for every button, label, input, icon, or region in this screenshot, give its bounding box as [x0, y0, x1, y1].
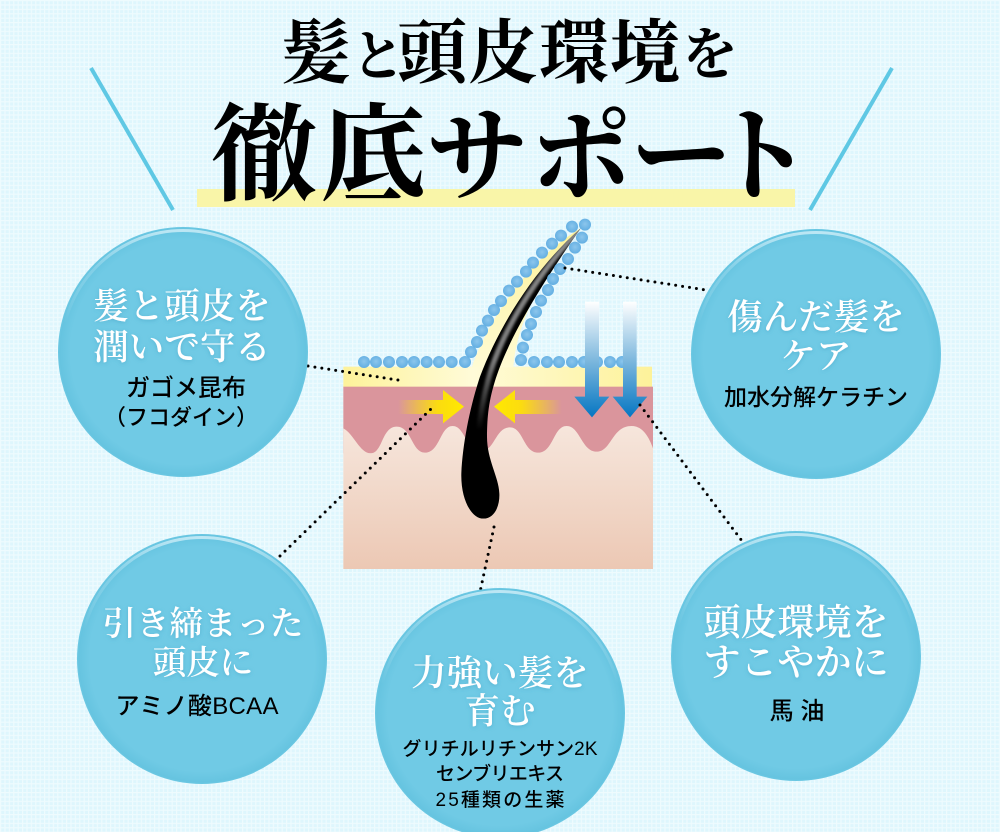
panel: moisturize hair and scalp: [58, 227, 308, 477]
panel: healthy scalp environment: 馬 油: [770, 698, 824, 725]
arrow: blue down 2: [613, 302, 647, 417]
lower skin with wavy edge: [343, 426, 653, 569]
panel: care for damaged hair: [691, 229, 941, 479]
title line 1: を: [682, 25, 738, 87]
title line 2: サ: [426, 102, 528, 215]
dotted leader lines: [280, 268, 742, 592]
cuticle beads: [358, 219, 628, 368]
pink skin layer: [343, 387, 653, 453]
panel: firm scalp: アミノ酸BCAA: [116, 693, 278, 720]
panel: firm scalp: 引き締まった: [102, 606, 304, 643]
title highlight bar: [197, 189, 795, 207]
panel: healthy scalp environment: 頭皮環境を: [704, 602, 888, 644]
right decorative slash: [810, 68, 892, 210]
panel: moisturize hair and scalp: ガゴメ昆布: [126, 375, 246, 402]
panel: strong hair: [375, 588, 625, 832]
panel: moisturize hair and scalp: 髪と頭皮を: [93, 286, 271, 326]
left decorative slash: [91, 68, 173, 210]
yellow hair sheath: [472, 228, 581, 367]
title line 2: ポ: [530, 102, 632, 215]
title line 1: 境: [610, 16, 680, 93]
title line 1: 環: [539, 16, 609, 93]
panel: healthy scalp environment: [671, 531, 921, 781]
panel: firm scalp: 頭皮に: [153, 645, 253, 682]
panel: strong hair: グリチルリチンサン2K: [402, 738, 598, 760]
arrow: blue down 1: [574, 302, 609, 417]
hair and scalp cross-section diagram: [343, 219, 653, 569]
panel: healthy scalp environment: すこやかに: [704, 643, 888, 684]
panel: care for damaged hair: 傷んだ髪を: [727, 297, 905, 337]
title line 1: 頭: [397, 16, 471, 93]
title line 1: 髪: [281, 16, 351, 93]
panel: care for damaged hair: ケア: [780, 336, 852, 376]
panel: strong hair: センブリエキス: [436, 762, 564, 785]
panel: strong hair: 育む: [464, 691, 536, 731]
title line 2: ト: [710, 102, 812, 215]
panel: strong hair: 力強い髪を: [411, 653, 589, 693]
panel: firm scalp: [77, 534, 327, 784]
title line 1: 皮: [468, 16, 538, 93]
panel: moisturize hair and scalp: 潤いで守る: [93, 327, 271, 367]
title line 2: ー: [630, 102, 732, 215]
hair strand: [461, 228, 580, 519]
arrow: right yellow: [494, 390, 562, 423]
title line 2: 徹: [211, 98, 317, 215]
panel: strong hair: 25種類の生薬: [436, 789, 564, 811]
yellow moisture layer: [343, 367, 652, 387]
arrow: left yellow: [398, 390, 464, 423]
panel: moisturize hair and scalp: （フコダイン）: [104, 405, 258, 430]
title line 2: 底: [320, 98, 426, 215]
panel: care for damaged hair: 加水分解ケラチン: [724, 384, 908, 410]
title line 1: と: [351, 27, 405, 87]
